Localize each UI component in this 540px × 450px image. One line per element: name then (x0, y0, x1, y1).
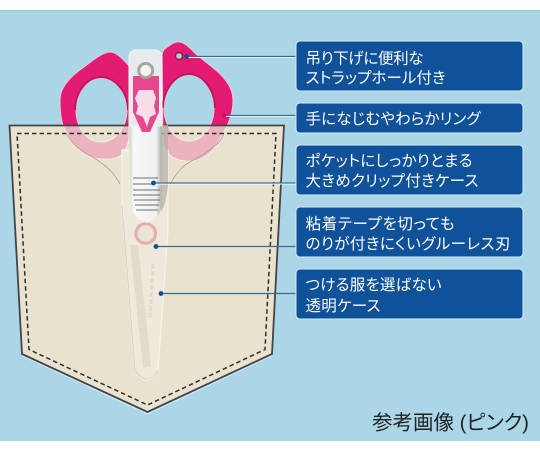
scissor body curves (67, 134, 224, 184)
callout: clip case: ポケットにしっかりとまる (306, 152, 472, 170)
callout: glueless blade: のりが付きにくいグルーレス刃 (306, 235, 510, 253)
callout: glueless blade (296, 207, 523, 257)
clear section with pink (133, 76, 159, 132)
callout: soft ring: 手になじむやわらかリング (306, 110, 481, 128)
ring on case (136, 224, 156, 243)
pocket outline and stitching (10, 126, 284, 412)
scissor handles (60, 42, 233, 161)
leader line: ring (222, 113, 296, 118)
grommet (139, 64, 153, 78)
clip shadow (161, 125, 168, 212)
callout: transparent case (296, 269, 523, 319)
callout: strap hole: ストラップホール付き (306, 69, 446, 87)
callout: clip case (296, 145, 523, 195)
right handle (162, 42, 233, 161)
clip ridges (133, 178, 160, 210)
callout: transparent case: つける服を選ばない (306, 276, 442, 294)
callout: glueless blade: 粘着テープを切っても (306, 215, 454, 233)
blade (130, 245, 151, 368)
leader line: clip (151, 181, 296, 185)
engraved text mark (150, 264, 153, 318)
leader line: case (159, 291, 296, 296)
callout: soft ring (296, 103, 523, 133)
strap hole (175, 52, 183, 60)
pocket (10, 126, 284, 414)
transparent case (122, 150, 168, 380)
leader line: blade (154, 244, 296, 249)
clip (129, 50, 168, 223)
leader line: strap hole (184, 54, 296, 59)
callout: transparent case: 透明ケース (306, 297, 380, 315)
callout: strap hole: 吊り下げに便利な (306, 50, 424, 68)
callout: strap hole (296, 41, 523, 91)
callout: clip case: 大きめクリップ付きケース (306, 172, 478, 190)
caption: 参考画像 (ピンク) (372, 412, 529, 434)
left handle (60, 52, 129, 159)
